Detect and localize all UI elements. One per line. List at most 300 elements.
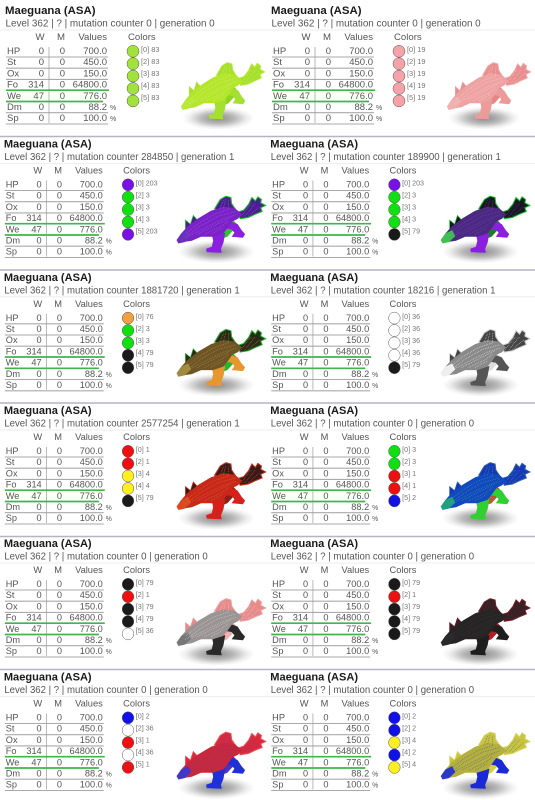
color swatches bbox=[122, 312, 154, 374]
stats table: 0 bbox=[60, 68, 65, 79]
stats table: 0 bbox=[39, 113, 44, 124]
stats table: Dm bbox=[272, 635, 287, 645]
stats table: St bbox=[6, 590, 15, 600]
stats table: 450.0 bbox=[80, 590, 103, 600]
stats table: 0 bbox=[323, 346, 328, 356]
stats table: 0 bbox=[60, 46, 65, 57]
stats table: 0 bbox=[37, 712, 42, 723]
stats table: 0 bbox=[303, 369, 308, 379]
stats table: 100.0 bbox=[80, 380, 103, 390]
stats table: 0 bbox=[303, 502, 308, 512]
stats table: Dm bbox=[272, 235, 287, 246]
stats table: St bbox=[6, 457, 15, 467]
stats table: Values bbox=[341, 299, 369, 310]
color swatches: [2] 83 bbox=[141, 57, 160, 66]
stats table: 0 bbox=[57, 757, 62, 767]
stats table: 150.0 bbox=[346, 735, 369, 745]
title: Maeguana (ASA) bbox=[270, 138, 358, 151]
stats table: 314 bbox=[26, 612, 42, 623]
stats table: 88.2 bbox=[85, 502, 103, 512]
stats table: % bbox=[372, 383, 378, 390]
stats table: Fo bbox=[7, 80, 18, 91]
subtitle: Level 362 | ? | mutation counter 0 | generation 0 bbox=[271, 685, 475, 696]
stats table: 0 bbox=[303, 590, 308, 600]
stats table: 0 bbox=[57, 502, 62, 512]
stats table: M bbox=[54, 165, 62, 177]
stats table: % bbox=[372, 782, 378, 790]
stats table: HP bbox=[6, 313, 19, 323]
stats table: We bbox=[6, 357, 19, 368]
stats table: 0 bbox=[323, 746, 328, 756]
stats table: 0 bbox=[326, 102, 331, 113]
stats table: Sp bbox=[7, 113, 19, 124]
stats table bbox=[265, 164, 535, 258]
stats table: We bbox=[272, 491, 286, 501]
stats table bbox=[265, 430, 535, 524]
stats table: 0 bbox=[57, 746, 62, 756]
stats table: 0 bbox=[57, 491, 62, 501]
subtitle: Level 362 | ? | mutation counter 0 | generation 0 bbox=[272, 18, 481, 30]
color swatches: [0] 19 bbox=[407, 45, 426, 54]
panel: card row 5 right bbox=[265, 538, 535, 666]
stats table: 700.0 bbox=[83, 46, 107, 57]
stats table: 0 bbox=[57, 612, 62, 623]
color swatches: [3] 83 bbox=[141, 69, 160, 78]
stats table: 0 bbox=[323, 779, 328, 790]
stats table: % bbox=[372, 505, 378, 512]
stats table: 0 bbox=[57, 624, 62, 634]
stats table: Values bbox=[75, 432, 103, 443]
stats table: 0 bbox=[57, 313, 62, 323]
stats table: HP bbox=[272, 446, 285, 456]
stats table: % bbox=[110, 105, 116, 112]
stats table: 0 bbox=[303, 191, 308, 201]
stats table: 100.0 bbox=[349, 113, 373, 124]
stats table: 0 bbox=[326, 80, 331, 91]
stats table: 0 bbox=[323, 468, 328, 478]
stats table: 700.0 bbox=[346, 446, 369, 456]
title: Maeguana (ASA) bbox=[4, 272, 92, 284]
creature bbox=[181, 63, 265, 130]
stats table: 700.0 bbox=[346, 313, 369, 323]
stats table: Colors bbox=[128, 32, 156, 43]
color swatches: [4] 3 bbox=[136, 214, 150, 224]
stats table: 47 bbox=[298, 757, 308, 767]
stats table: Sp bbox=[272, 779, 283, 790]
stats table: M bbox=[321, 299, 329, 310]
stats table: 64800.0 bbox=[70, 612, 103, 623]
stats table: 450.0 bbox=[80, 324, 103, 334]
color swatches: [2] 3 bbox=[136, 324, 150, 333]
stats table: 0 bbox=[323, 369, 328, 379]
stats table: W bbox=[33, 565, 42, 576]
stats table: 150.0 bbox=[80, 601, 103, 611]
panel: card row 6 left bbox=[0, 671, 266, 799]
stats table: HP bbox=[272, 179, 285, 190]
stats table: 0 bbox=[326, 46, 331, 57]
stats table: 0 bbox=[323, 579, 328, 589]
stats table: 64800.0 bbox=[70, 213, 103, 223]
stats table: 0 bbox=[323, 491, 328, 501]
stats table: Dm bbox=[272, 502, 287, 512]
stats table: 0 bbox=[323, 446, 328, 456]
color swatches: [5] 36 bbox=[136, 626, 154, 635]
stats table: Ox bbox=[272, 601, 284, 611]
stats table: 0 bbox=[57, 646, 62, 656]
stats table: 0 bbox=[57, 457, 62, 467]
stats table: 0 bbox=[323, 313, 328, 323]
stats table: 150.0 bbox=[346, 335, 369, 345]
stats table: Fo bbox=[6, 213, 17, 223]
stats table: 0 bbox=[303, 712, 308, 723]
stats table: M bbox=[321, 432, 329, 443]
stats table: Values bbox=[341, 698, 369, 710]
stats table bbox=[0, 297, 266, 391]
stats table: 0 bbox=[37, 502, 42, 512]
stats table: 0 bbox=[323, 601, 328, 611]
stats table: 0 bbox=[323, 202, 328, 212]
color swatches: [5] 79 bbox=[136, 493, 154, 502]
stats table: 0 bbox=[303, 457, 308, 467]
stats table: 0 bbox=[57, 335, 62, 345]
stats table: HP bbox=[6, 712, 19, 723]
stats table: 0 bbox=[323, 724, 328, 734]
stats table: 47 bbox=[31, 357, 42, 368]
stats table: 700.0 bbox=[80, 446, 103, 456]
stats table: St bbox=[272, 191, 281, 201]
stats table: Colors bbox=[390, 565, 417, 576]
stats table: 0 bbox=[57, 712, 62, 723]
stats table: Values bbox=[341, 565, 369, 576]
stats table: 0 bbox=[323, 213, 328, 223]
stats table bbox=[0, 30, 266, 124]
stats table bbox=[266, 30, 535, 124]
stats table: 88.2 bbox=[85, 369, 103, 379]
stats table: 100.0 bbox=[80, 779, 103, 790]
stats table: 0 bbox=[303, 235, 308, 246]
stats table: 0 bbox=[37, 468, 42, 478]
stats table bbox=[265, 297, 535, 391]
stats table: Sp bbox=[272, 646, 283, 656]
stats table: Fo bbox=[272, 479, 283, 490]
stats table: 0 bbox=[37, 579, 42, 589]
stats table: Values bbox=[75, 165, 103, 177]
stats table: 0 bbox=[57, 213, 62, 223]
stats table: 0 bbox=[303, 380, 308, 390]
stats table: Ox bbox=[7, 68, 19, 79]
stats table: W bbox=[33, 698, 42, 710]
stats table: W bbox=[35, 32, 45, 43]
stats table: Dm bbox=[7, 102, 22, 113]
stats table: 47 bbox=[298, 491, 308, 501]
stats table: 0 bbox=[305, 102, 310, 113]
stats table: 0 bbox=[303, 779, 308, 790]
color swatches bbox=[389, 445, 416, 507]
stats table: 0 bbox=[37, 768, 42, 779]
stats table: Colors bbox=[390, 299, 417, 310]
stats table: Colors bbox=[390, 698, 417, 710]
creature bbox=[441, 599, 530, 666]
stats table: Colors bbox=[123, 165, 150, 177]
stats table: 776.0 bbox=[80, 624, 103, 634]
stats table: 450.0 bbox=[80, 457, 103, 467]
divider lines bbox=[0, 136, 535, 670]
stats table: We bbox=[6, 624, 19, 634]
stats table: Sp bbox=[6, 646, 17, 656]
title: Maeguana (ASA) bbox=[4, 538, 92, 550]
subtitle: Level 362 | ? | mutation counter 2577254 | generation 1 bbox=[4, 418, 240, 430]
title: Maeguana (ASA) bbox=[270, 538, 358, 550]
stats table: St bbox=[272, 590, 281, 600]
stats table: M bbox=[54, 432, 62, 443]
stats table: 700.0 bbox=[80, 579, 103, 589]
stats table: Ox bbox=[272, 335, 284, 345]
stats table: 314 bbox=[293, 746, 308, 756]
stats table: 0 bbox=[60, 57, 65, 68]
stats table: % bbox=[106, 649, 112, 656]
color swatches: [0] 36 bbox=[402, 312, 420, 321]
color swatches: [0] 2 bbox=[402, 711, 416, 721]
stats table: 0 bbox=[323, 590, 328, 600]
stats table: 100.0 bbox=[346, 779, 369, 790]
stats table: 0 bbox=[57, 601, 62, 611]
color swatches: [3] 36 bbox=[402, 336, 420, 345]
stats table: % bbox=[372, 238, 378, 246]
stats table: W bbox=[33, 432, 42, 443]
stats table: 0 bbox=[323, 502, 328, 512]
stats table: Dm bbox=[6, 235, 20, 246]
stats table: % bbox=[372, 771, 378, 779]
stats table: 776.0 bbox=[349, 91, 373, 102]
stats table: 88.2 bbox=[354, 102, 373, 113]
stats table: % bbox=[372, 649, 378, 656]
panel: card row 1 right bbox=[266, 5, 535, 130]
stats table: 88.2 bbox=[351, 369, 369, 379]
stats table: Ox bbox=[272, 202, 284, 212]
stats table: 0 bbox=[37, 735, 42, 745]
stats table: 0 bbox=[323, 224, 328, 234]
stats table: 776.0 bbox=[346, 357, 369, 368]
color swatches bbox=[122, 711, 154, 773]
stats table: 0 bbox=[57, 202, 62, 212]
stats table: 0 bbox=[37, 513, 42, 523]
stats table: Dm bbox=[273, 102, 288, 113]
color swatches: [4] 36 bbox=[402, 348, 420, 357]
stats table: HP bbox=[272, 579, 285, 589]
stats table: 0 bbox=[57, 191, 62, 201]
color swatches bbox=[122, 445, 154, 507]
stats table: 0 bbox=[37, 324, 42, 334]
stats table: 0 bbox=[57, 224, 62, 234]
stats table: 0 bbox=[57, 380, 62, 390]
stats table: 0 bbox=[323, 380, 328, 390]
stats table: 64800.0 bbox=[336, 746, 369, 756]
stats table: 0 bbox=[323, 235, 328, 246]
stats table: 0 bbox=[60, 91, 65, 102]
stats table: % bbox=[106, 505, 112, 512]
color swatches: [0] 1 bbox=[136, 445, 150, 454]
color swatches: [4] 79 bbox=[136, 348, 154, 357]
stats table: 0 bbox=[323, 635, 328, 645]
color swatches: [3] 4 bbox=[136, 469, 150, 478]
stats table: % bbox=[372, 638, 378, 645]
stats table: 64800.0 bbox=[336, 346, 369, 356]
stats table: 0 bbox=[303, 735, 308, 745]
stats table: Ox bbox=[6, 202, 18, 212]
stats table: 776.0 bbox=[80, 757, 103, 767]
stats table: 0 bbox=[303, 579, 308, 589]
color swatches: [2] 2 bbox=[402, 723, 416, 733]
color swatches: [5] 79 bbox=[136, 360, 154, 369]
stats table: HP bbox=[273, 46, 286, 57]
stats table: 64800.0 bbox=[339, 80, 373, 91]
stats table: % bbox=[372, 249, 378, 257]
stats table: St bbox=[273, 57, 282, 68]
stats table: Values bbox=[341, 165, 369, 177]
stats table: 0 bbox=[323, 513, 328, 523]
stats table: % bbox=[372, 372, 378, 379]
stats table: 314 bbox=[294, 80, 310, 91]
stats table: Values bbox=[344, 32, 373, 43]
color swatches: [0] 203 bbox=[136, 178, 158, 188]
stats table: % bbox=[106, 238, 112, 246]
stats table: M bbox=[323, 32, 331, 43]
stats table: 0 bbox=[37, 246, 42, 257]
stats table: 100.0 bbox=[346, 646, 369, 656]
stats table: 0 bbox=[323, 646, 328, 656]
stats table: % bbox=[106, 782, 112, 790]
stats table: 700.0 bbox=[346, 579, 369, 589]
panel: card row 2 right bbox=[265, 138, 535, 263]
color swatches: [3] 1 bbox=[136, 735, 150, 745]
stats table: % bbox=[106, 771, 112, 779]
color swatches: [3] 79 bbox=[402, 602, 420, 611]
stats table: 0 bbox=[39, 57, 44, 68]
stats table: 314 bbox=[293, 612, 308, 623]
stats table: 450.0 bbox=[346, 324, 369, 334]
stats table: 776.0 bbox=[83, 91, 107, 102]
stats table: Sp bbox=[272, 246, 283, 257]
stats table: 64800.0 bbox=[336, 612, 369, 623]
stats table: 47 bbox=[31, 224, 42, 234]
stats table: M bbox=[54, 299, 62, 310]
color swatches: [5] 79 bbox=[402, 360, 420, 369]
stats table: 0 bbox=[303, 313, 308, 323]
stats table: 0 bbox=[323, 757, 328, 767]
stats table: 0 bbox=[323, 357, 328, 368]
stats table: Sp bbox=[6, 779, 17, 790]
stats table: 0 bbox=[305, 57, 310, 68]
stats table: Fo bbox=[6, 612, 17, 623]
stats table: 0 bbox=[37, 335, 42, 345]
stats table: 0 bbox=[57, 446, 62, 456]
stats table: Values bbox=[75, 565, 103, 576]
stats table: 0 bbox=[57, 235, 62, 246]
stats table: M bbox=[54, 565, 62, 576]
color swatches: [4] 83 bbox=[141, 81, 160, 90]
color swatches: [0] 79 bbox=[402, 578, 420, 587]
stats table: 700.0 bbox=[80, 712, 103, 723]
creature bbox=[177, 463, 266, 530]
stats table: We bbox=[272, 357, 286, 368]
color swatches: [5] 1 bbox=[136, 759, 150, 769]
stats table: 450.0 bbox=[349, 57, 373, 68]
stats table: 47 bbox=[31, 624, 42, 634]
stats table: Fo bbox=[6, 479, 17, 490]
stats table: Ox bbox=[6, 601, 18, 611]
color swatches bbox=[389, 578, 420, 640]
stats table: Colors bbox=[123, 698, 150, 710]
stats table: 0 bbox=[323, 768, 328, 779]
creature bbox=[177, 599, 266, 666]
color swatches: [2] 1 bbox=[136, 590, 150, 599]
stats table: 0 bbox=[57, 779, 62, 790]
creature bbox=[447, 63, 531, 130]
subtitle: Level 362 | ? | mutation counter 284850 | generation 1 bbox=[4, 152, 234, 163]
stats table: W bbox=[300, 299, 309, 310]
stats table: Sp bbox=[272, 380, 283, 390]
stats table: W bbox=[301, 32, 311, 43]
stats table: W bbox=[33, 165, 42, 177]
stats table: 0 bbox=[323, 735, 328, 745]
stats table: M bbox=[54, 698, 62, 710]
stats table: Dm bbox=[6, 502, 20, 512]
stats table: 0 bbox=[37, 235, 42, 246]
stats table: Colors bbox=[390, 432, 417, 443]
stats table: Dm bbox=[6, 369, 20, 379]
title: Maeguana (ASA) bbox=[270, 272, 358, 284]
panel: card row 3 left bbox=[0, 272, 266, 397]
stats table: 0 bbox=[57, 246, 62, 257]
stats table: Fo bbox=[272, 213, 283, 223]
color swatches: [2] 3 bbox=[136, 190, 150, 200]
stats table: 47 bbox=[299, 91, 310, 102]
color swatches: [5] 79 bbox=[402, 226, 420, 236]
title: Maeguana (ASA) bbox=[270, 671, 358, 684]
stats table: 100.0 bbox=[83, 113, 107, 124]
stats table: 0 bbox=[60, 80, 65, 91]
stats table: 0 bbox=[326, 57, 331, 68]
stats table: 0 bbox=[323, 457, 328, 467]
stats table: 0 bbox=[303, 635, 308, 645]
subtitle: Level 362 | ? | mutation counter 1881720 | generation 1 bbox=[4, 285, 240, 296]
stats table: 314 bbox=[293, 479, 308, 490]
color swatches bbox=[389, 312, 420, 374]
stats table: HP bbox=[272, 712, 285, 723]
stats table: 0 bbox=[37, 724, 42, 734]
stats table: 0 bbox=[326, 113, 331, 124]
stats table: 314 bbox=[293, 213, 308, 223]
color swatches: [0] 2 bbox=[136, 711, 150, 721]
color swatches: [4] 19 bbox=[407, 81, 426, 90]
stats table: 0 bbox=[39, 102, 44, 113]
stats table: % bbox=[110, 116, 116, 123]
color swatches: [4] 1 bbox=[402, 481, 416, 490]
color swatches: [5] 19 bbox=[407, 93, 426, 102]
stats table: Values bbox=[75, 299, 103, 310]
creature bbox=[441, 463, 530, 530]
stats table: 0 bbox=[323, 324, 328, 334]
color swatches: [4] 4 bbox=[136, 481, 150, 490]
stats table: 776.0 bbox=[80, 357, 103, 368]
stats table: 0 bbox=[323, 191, 328, 201]
stats table: Fo bbox=[273, 80, 284, 91]
stats table: Fo bbox=[272, 612, 283, 623]
stats table: 64800.0 bbox=[336, 213, 369, 223]
stats table: 0 bbox=[57, 579, 62, 589]
creature bbox=[177, 196, 266, 263]
stats table: 0 bbox=[323, 624, 328, 634]
